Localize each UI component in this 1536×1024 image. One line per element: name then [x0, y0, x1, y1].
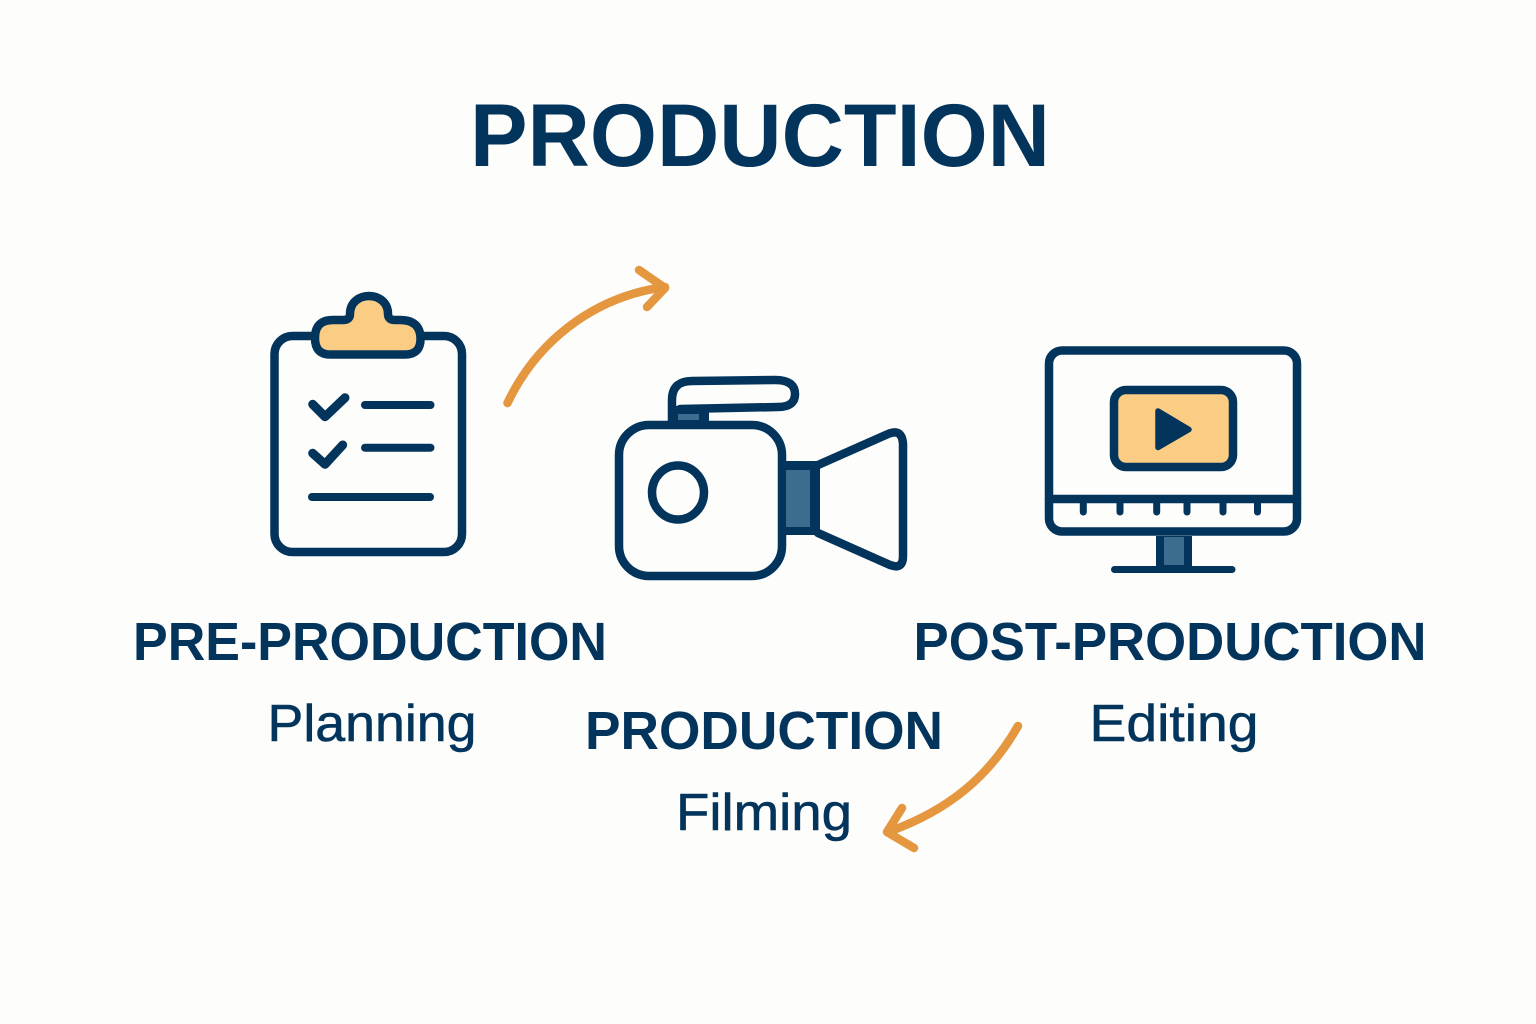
title: PRODUCTION: [470, 85, 1050, 185]
label: filming: Filming: [676, 784, 852, 842]
arrow: post-production to production: [887, 726, 1018, 848]
label: pre-production: PRE-PRODUCTION: [133, 612, 607, 672]
icon: clipboard checklist: [274, 296, 462, 552]
arrow: pre-production to production: [508, 270, 665, 403]
icon: monitor with video player: [1049, 350, 1297, 570]
label: production: PRODUCTION: [585, 701, 943, 761]
label: editing: Editing: [1090, 695, 1258, 753]
icon: video camera: [619, 380, 903, 576]
label: planning: Planning: [268, 695, 476, 753]
label: post-production: POST-PRODUCTION: [914, 612, 1426, 672]
